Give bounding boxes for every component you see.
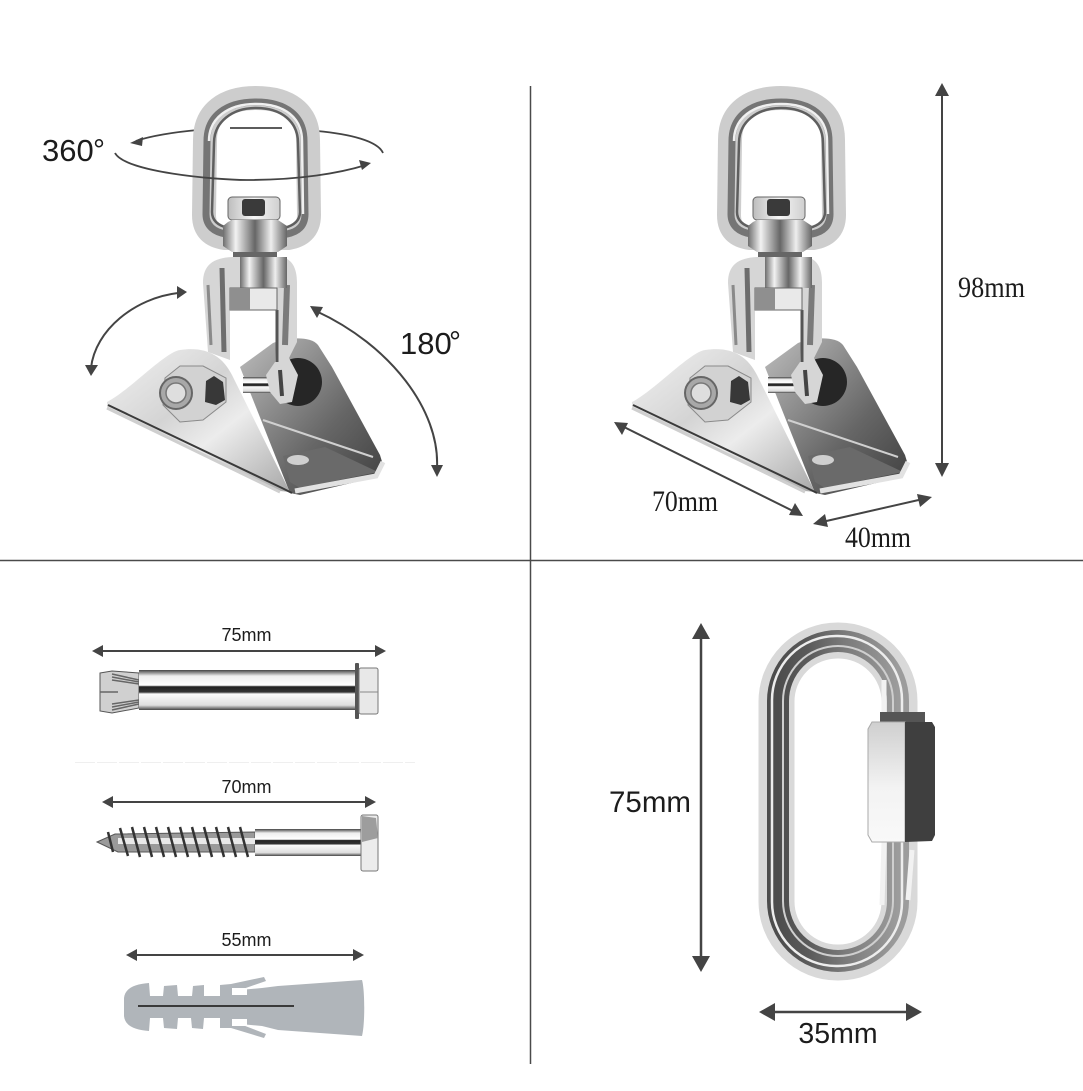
front 360 rotation arrow: [115, 137, 371, 180]
arrow: 55mm: [126, 949, 364, 961]
arrow: 70mm: [102, 796, 376, 808]
panel: mount dimensions: [614, 83, 1025, 554]
icon: lag screw: [97, 815, 378, 871]
label: 40mm: 40mm: [845, 521, 911, 554]
label: 70mm: 70mm: [652, 485, 718, 518]
arrow: 75mm: [92, 645, 386, 657]
icon: swivel hook with rotation mount: [107, 98, 383, 495]
arrow: 75mm height: [692, 623, 710, 972]
icon: wall plug: [124, 977, 364, 1038]
label: 55mm: 55mm: [221, 930, 272, 950]
label: 75mm: 75mm: [221, 625, 272, 645]
faint separator: [75, 762, 415, 764]
arrow: 98mm height: [935, 83, 949, 477]
label: 360 degrees: 360: [42, 133, 94, 168]
label: 98mm: 98mm: [958, 271, 1025, 304]
divider: vertical: [530, 86, 532, 1064]
rear 360 rotation arc: [136, 128, 383, 153]
label: 180 degrees: 180: [400, 326, 452, 361]
arrow: 70mm length: [614, 422, 803, 516]
label: 180 degrees: °: [449, 326, 461, 359]
arrow: left tilt arc: [85, 286, 187, 376]
panel: rotation angles: [42, 98, 461, 495]
panel: quick link: [609, 623, 935, 1050]
arrow: right tilt arc: [310, 306, 443, 477]
label: 70mm: 70mm: [221, 777, 272, 797]
icon: expansion bolt: [100, 663, 378, 719]
icon: swivel hook mount: [632, 98, 908, 495]
label: 360 degrees: °: [93, 134, 105, 167]
label: 75mm: 75mm: [609, 786, 691, 819]
arrow: 35mm width: [759, 1003, 922, 1021]
arrow: 40mm width: [813, 494, 932, 527]
divider: horizontal: [0, 560, 1083, 562]
label: 35mm: 35mm: [798, 1018, 878, 1050]
icon: quick link carabiner: [772, 636, 935, 966]
panel: fixings: [75, 625, 415, 1038]
